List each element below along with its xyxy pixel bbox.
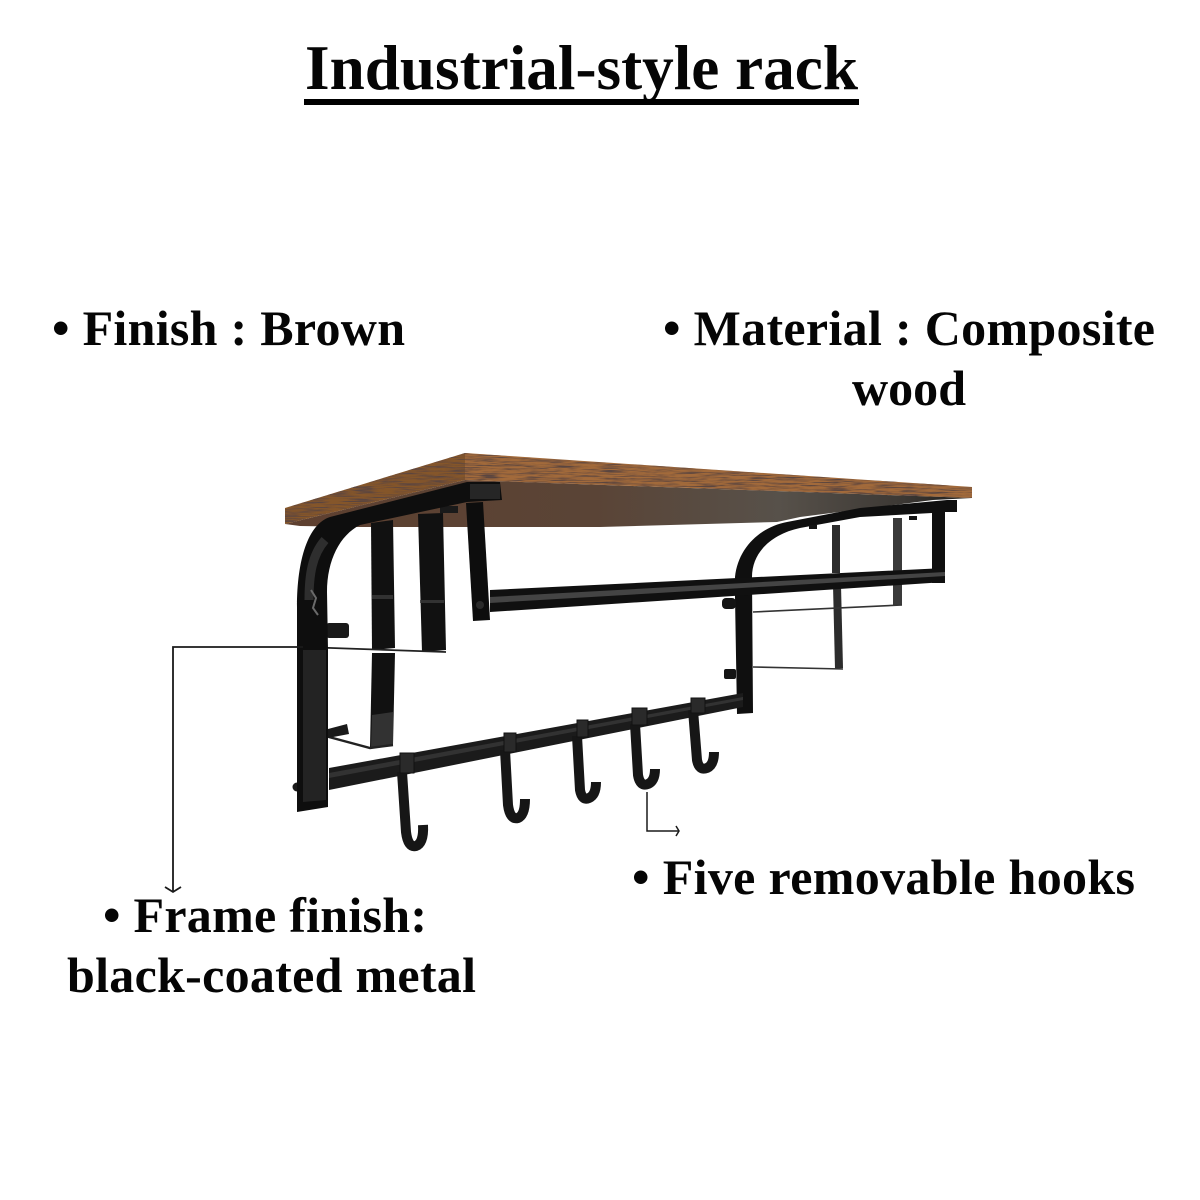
- left thin lines: [303, 647, 446, 748]
- label: five removable hooks: • Five removable hooks: [632, 849, 1135, 905]
- label: material: wood: [852, 360, 966, 416]
- left straps: [370, 513, 446, 748]
- arrow: frame finish leader: [165, 647, 303, 892]
- right thin lines: [753, 605, 902, 669]
- left bolts: [292, 506, 458, 792]
- label: frame finish: black-coated metal: [67, 947, 476, 1003]
- left bracket: [297, 482, 502, 812]
- strap highlights: [371, 595, 444, 747]
- shelf underside: [285, 480, 972, 527]
- label: frame finish: • Frame finish:: [103, 887, 427, 943]
- hook clips: [400, 698, 705, 773]
- label: frame finish: [67, 887, 476, 1003]
- arrow: hooks leader: [647, 792, 679, 836]
- shelf top edge: left side: [285, 453, 465, 524]
- shelf front edge wood: [465, 453, 972, 498]
- right bolts: [722, 516, 917, 679]
- label: material: [663, 300, 1155, 416]
- label: finish: • Finish : Brown: [52, 300, 405, 356]
- right back straps: [832, 518, 902, 669]
- hooks: [402, 710, 714, 846]
- hook rail: [329, 693, 743, 790]
- label: material: • Material : Composite: [663, 300, 1155, 356]
- left bracket highlights: [303, 484, 500, 802]
- product illustration: wall rack: [285, 453, 972, 846]
- hanging rod: [490, 568, 945, 612]
- right bracket: [735, 500, 957, 714]
- hanging arm: [466, 502, 490, 621]
- title: Industrial-style rack: [305, 32, 858, 103]
